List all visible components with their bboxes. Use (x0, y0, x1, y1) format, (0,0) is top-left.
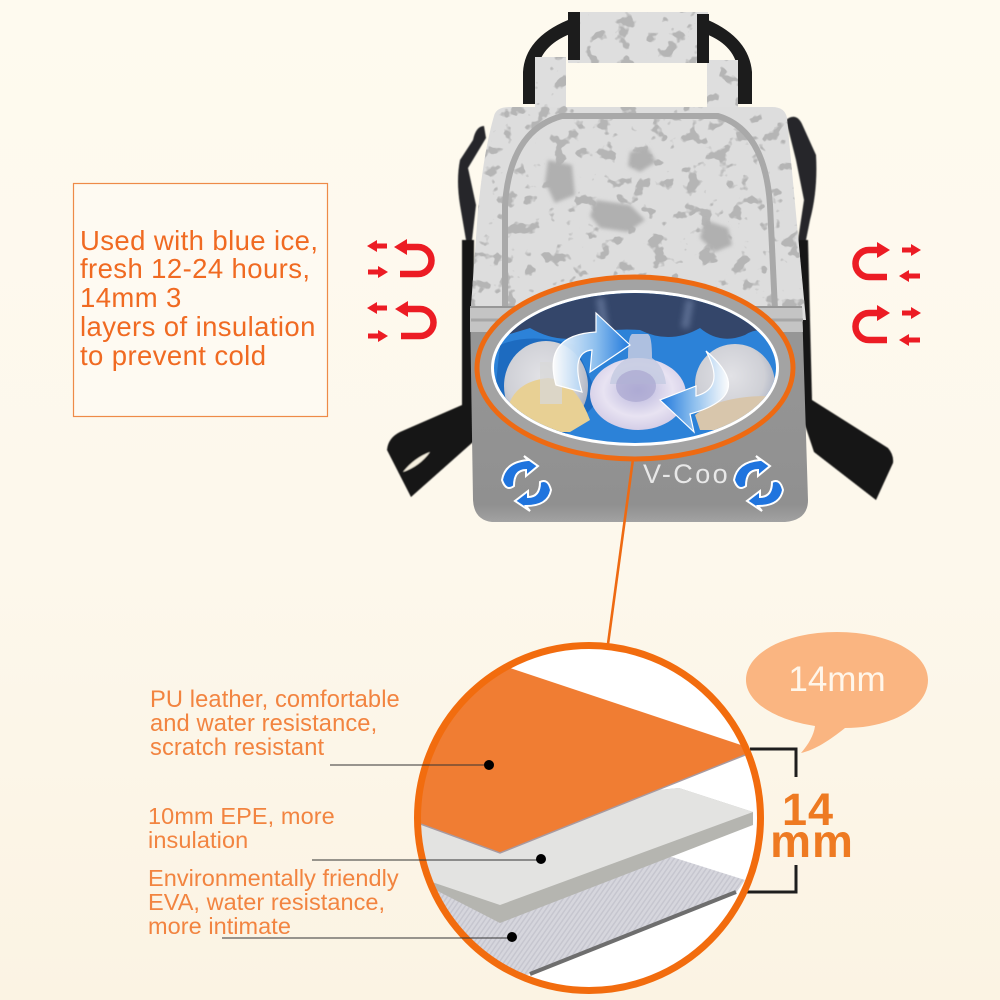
bag upper body (465, 100, 810, 325)
speech bubble: 14mm (746, 632, 928, 753)
callout: PU leather: and water resistance, (150, 711, 377, 737)
text: insulation description: fresh 12-24 hours, (80, 253, 310, 284)
thickness label: 14 (782, 784, 834, 835)
red arrows: right upper (856, 242, 921, 282)
thickness label (770, 784, 854, 867)
material layers circle (400, 646, 761, 990)
callout: EVA: EVA, water resistance, (148, 889, 385, 915)
connector line (608, 459, 633, 644)
swoosh arrow: lower (660, 351, 729, 432)
oval callout: bag interior (477, 277, 793, 459)
swoosh arrow: upper (553, 313, 630, 392)
shoulder strap: left (387, 126, 486, 497)
red arrows: right lower (856, 305, 921, 346)
shoulder strap: right (786, 117, 893, 500)
icon: circulation arrows left (502, 456, 551, 511)
brand text: V-Coo (643, 459, 730, 489)
panel: insulation description (74, 184, 328, 416)
bottle: centre (590, 334, 686, 430)
speech bubble: 14mm: 14mm (788, 660, 886, 699)
callout: EVA: Environmentally friendly (148, 865, 399, 891)
text: insulation description: to prevent cold (80, 340, 266, 371)
callout: EPE (148, 803, 546, 864)
text: insulation description: layers of insulation (80, 311, 316, 342)
bag lower compartment (470, 306, 808, 522)
callout: EVA (148, 865, 517, 942)
callout: PU leather (150, 687, 494, 770)
layer: EVA (438, 857, 745, 976)
callout: PU leather: PU leather, comfortable (150, 687, 400, 713)
callout: EVA: more intimate (148, 913, 291, 939)
red arrows: left lower (367, 301, 434, 342)
callout: PU leather: scratch resistant (150, 735, 324, 761)
red arrows: left upper (367, 239, 432, 278)
icon: circulation arrows right (734, 456, 783, 511)
bottle: left (504, 341, 590, 432)
thickness label: mm (770, 815, 854, 867)
front pocket zipper (505, 116, 775, 310)
thickness bracket (743, 749, 796, 892)
handle (523, 10, 752, 110)
bottle: right (695, 344, 775, 430)
layer: PU leather (421, 668, 746, 854)
layer: EPE (405, 788, 753, 923)
bag illustration (387, 10, 893, 522)
callout: EPE: 10mm EPE, more (148, 803, 335, 829)
callout: EPE: insulation (148, 827, 248, 853)
text: insulation description: 14mm 3 (80, 282, 182, 313)
text: insulation description: Used with blue ice, (80, 225, 318, 256)
